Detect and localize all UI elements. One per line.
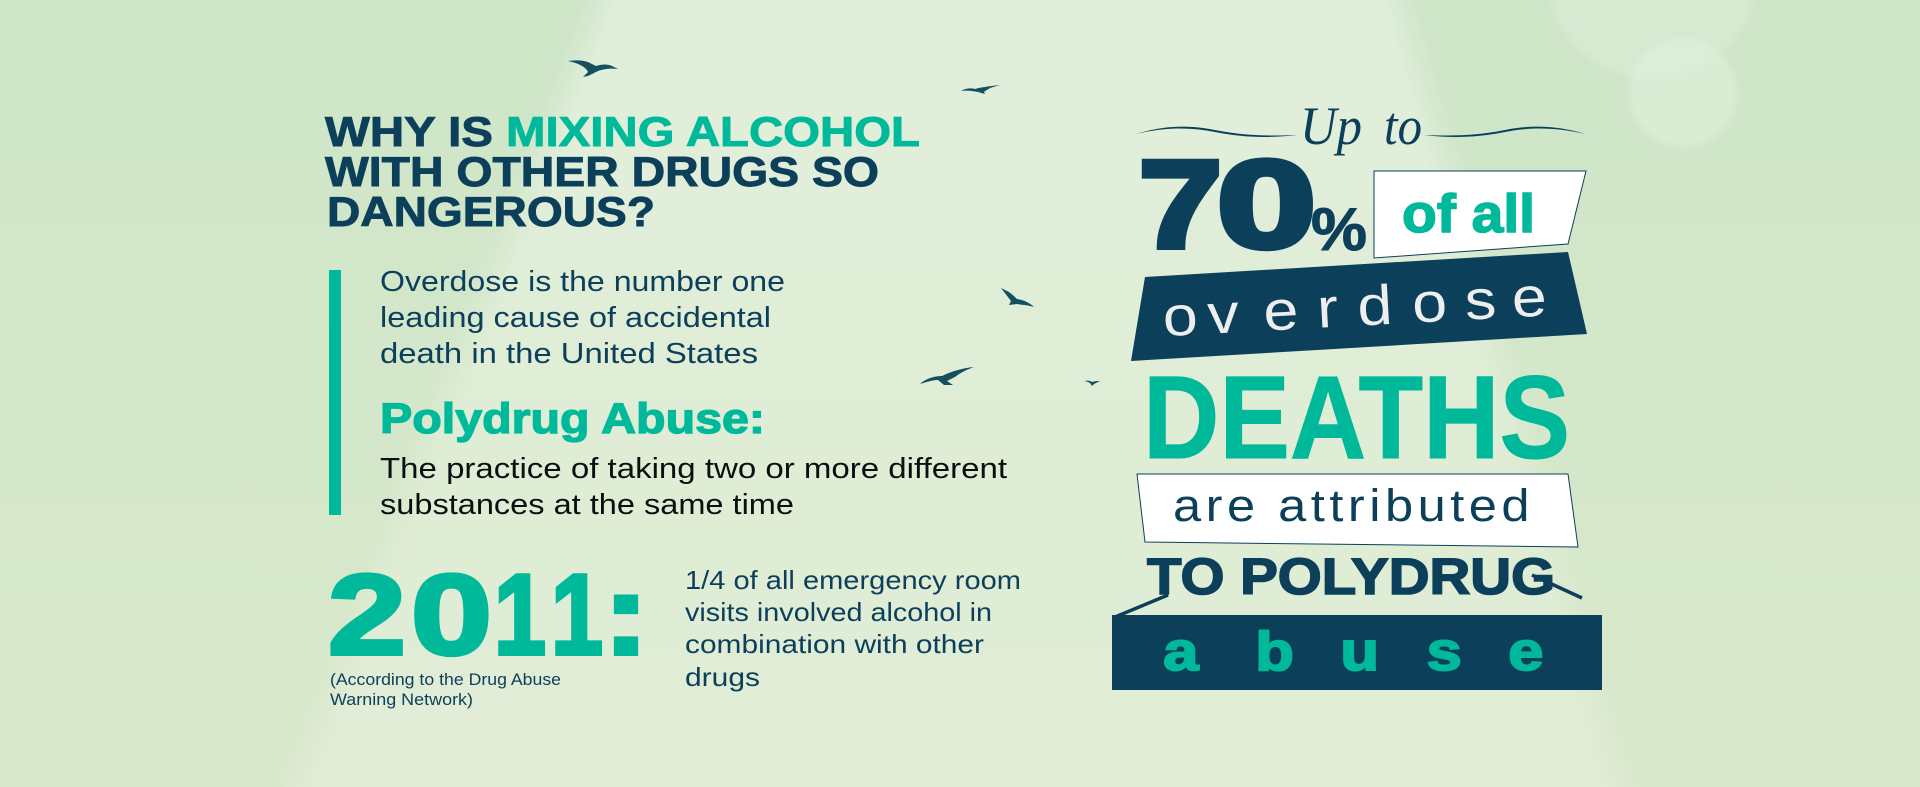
text block: emergency room: combination with other bbox=[685, 629, 984, 659]
title: MIXING ALCOHOL bbox=[506, 108, 920, 155]
source note bbox=[330, 671, 561, 709]
text block: definition: substances at the same time bbox=[380, 489, 794, 521]
big stat: 2011: 0 bbox=[411, 552, 492, 679]
connector lines bbox=[1115, 575, 1582, 617]
title: DANGEROUS? bbox=[327, 188, 655, 235]
script: up to: to bbox=[1384, 96, 1422, 156]
number: 70 bbox=[1139, 136, 1316, 274]
icon: bird 1 bbox=[568, 60, 618, 77]
accent bar bbox=[329, 270, 341, 515]
text block: definition bbox=[380, 453, 1007, 521]
box: of all bbox=[1374, 171, 1586, 258]
icon: bird 3 bbox=[1001, 288, 1034, 307]
label: of all: of all bbox=[1402, 184, 1535, 244]
text block: emergency room bbox=[685, 565, 1021, 692]
script: up to bbox=[1300, 96, 1422, 156]
title bbox=[325, 108, 920, 235]
word: to polydrug: TO POLYDRUG bbox=[1147, 548, 1555, 605]
text block: emergency room: 1/4 of all emergency room bbox=[685, 565, 1021, 595]
title: WITH OTHER DRUGS SO bbox=[325, 148, 879, 195]
percent sign: % bbox=[1311, 196, 1367, 263]
typographic panel: 70% statistic bbox=[1112, 96, 1602, 690]
text block: definition: The practice of taking two or more different bbox=[380, 453, 1007, 485]
script: up to: Up bbox=[1300, 96, 1362, 156]
label: abuse: abuse bbox=[1163, 620, 1543, 682]
label: are attributed: are attributed bbox=[1173, 480, 1534, 531]
source note: (According to the Drug Abuse bbox=[330, 671, 561, 689]
big stat: 2011: 2 bbox=[328, 552, 406, 679]
icon: bird flock bbox=[568, 60, 1100, 386]
banner: abuse bbox=[1112, 615, 1602, 690]
text block: overdose fact bbox=[380, 266, 785, 370]
big stat: 2011: 1 bbox=[551, 552, 603, 679]
title: WHY IS bbox=[325, 108, 493, 155]
icon: bird 5 bbox=[1084, 381, 1100, 386]
big stat: 2011 bbox=[328, 552, 649, 679]
text block: emergency room: visits involved alcohol in bbox=[685, 597, 992, 627]
text block: overdose fact: Overdose is the number one bbox=[380, 266, 785, 298]
number: 70: 0 bbox=[1217, 136, 1316, 274]
text block: overdose fact: death in the United States bbox=[380, 338, 758, 370]
flourish lines bbox=[1136, 127, 1586, 137]
label: overdose: overdose bbox=[1161, 265, 1548, 348]
source note: Warning Network) bbox=[330, 691, 473, 709]
icon: bird 4 bbox=[920, 367, 974, 385]
text block: emergency room: drugs bbox=[685, 662, 760, 692]
box: are attributed bbox=[1137, 474, 1578, 547]
text block: overdose fact: leading cause of accidental bbox=[380, 302, 771, 334]
word: deaths: DEATHS bbox=[1143, 352, 1570, 484]
icon: bird 2 bbox=[961, 85, 1000, 94]
big stat: 2011: 1 bbox=[494, 552, 546, 679]
heading: polydrug abuse: Polydrug Abuse: bbox=[380, 395, 765, 443]
banner: overdose bbox=[1131, 252, 1587, 361]
big stat: 2011: : bbox=[603, 552, 649, 679]
number: 70: 7 bbox=[1139, 136, 1222, 274]
